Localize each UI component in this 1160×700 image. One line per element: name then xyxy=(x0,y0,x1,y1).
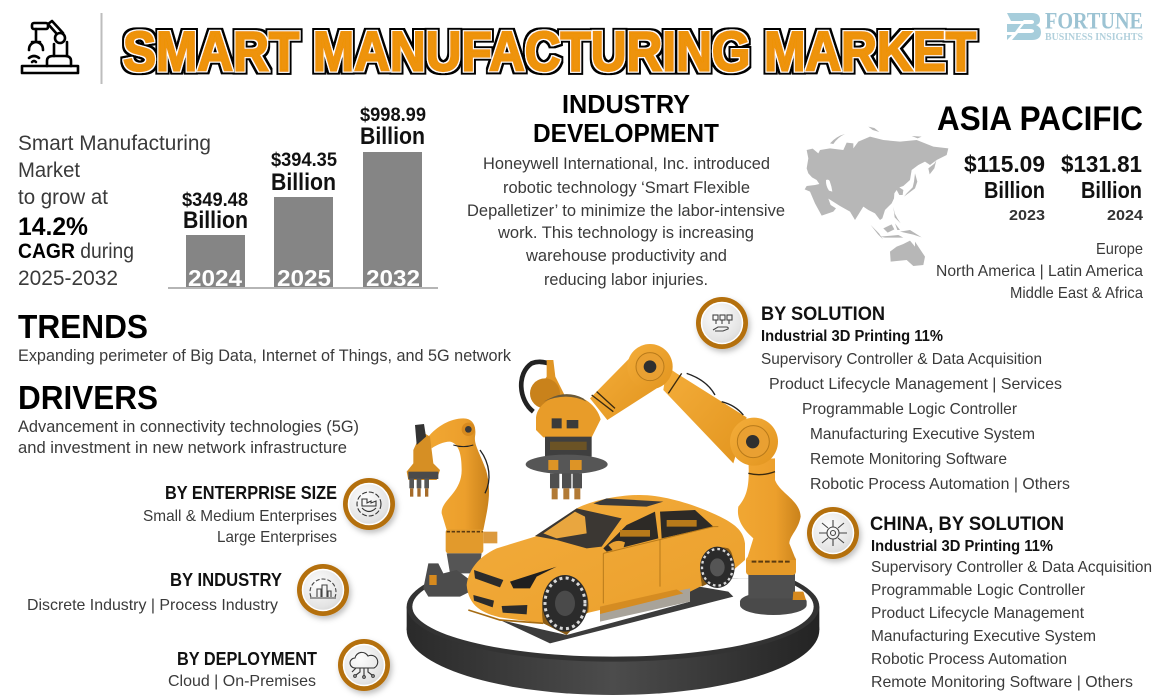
segment: China by solution: Programmable Logic Controller xyxy=(871,582,1086,599)
segment: by enterprise size: BY ENTERPRISE SIZE xyxy=(165,483,337,503)
value 2023: 2023 xyxy=(1009,207,1045,224)
other regions: North America | Latin America xyxy=(936,263,1143,280)
panel: trends xyxy=(18,308,512,365)
left robot xyxy=(407,418,497,597)
panel: industry development xyxy=(467,89,785,289)
segment: by solution: Product Lifecycle Management | Services xyxy=(769,376,1062,393)
panel: drivers xyxy=(18,379,359,457)
value 2023 xyxy=(964,151,1045,224)
bar 2024: Billion xyxy=(183,207,248,234)
bar chart: market size xyxy=(168,105,438,291)
text block: CAGR summary: 14.2% xyxy=(18,213,88,241)
paragraph: Honeywell International, Inc. introduced xyxy=(483,155,770,173)
text block: CAGR summary xyxy=(18,132,211,290)
segment: by enterprise size: Large Enterprises xyxy=(217,529,337,546)
other regions: Middle East & Africa xyxy=(1010,285,1143,302)
bar 2024 xyxy=(182,190,248,291)
segment: by enterprise size: Small & Medium Enterprises xyxy=(143,508,337,525)
icon: deployment xyxy=(338,639,390,691)
logo: Fortune Business Insights: BUSINESS INSIGHTS xyxy=(1045,32,1143,43)
segment: China by solution: Product Lifecycle Management xyxy=(871,605,1085,622)
title: SMART MANUFACTURING MARKET xyxy=(123,20,976,82)
segment: by deployment: Cloud | On-Premises xyxy=(168,673,316,690)
segment: by solution xyxy=(761,304,1070,493)
segment: China by solution: Industrial 3D Printing 11% xyxy=(871,538,1053,555)
segment: China by solution: Manufacturing Executive System xyxy=(871,628,1096,645)
segment: by industry: BY INDUSTRY xyxy=(170,570,282,590)
panel: trends: TRENDS xyxy=(18,308,148,345)
value 2023: $115.09 xyxy=(964,151,1045,177)
segment: China by solution: Supervisory Controller & Data Acquisition xyxy=(871,559,1152,576)
heading xyxy=(533,89,719,148)
segment: by industry xyxy=(27,570,282,614)
segment: by solution: Supervisory Controller & Data Acquisition xyxy=(761,351,1042,368)
panel: drivers: DRIVERS xyxy=(18,379,158,416)
segment: by solution: Programmable Logic Controller xyxy=(802,401,1018,418)
text block: CAGR summary: to grow at xyxy=(18,186,108,209)
paragraph: Depalletizer’ to minimize the labor-intensive xyxy=(467,202,785,220)
paragraph xyxy=(467,155,785,289)
segment: by solution: Remote Monitoring Software xyxy=(810,451,1007,468)
segment: by deployment xyxy=(168,649,317,690)
heading: ASIA PACIFIC xyxy=(937,100,1143,138)
text block: CAGR summary: 2025-2032 xyxy=(18,267,118,290)
paragraph: reducing labor injuries. xyxy=(544,271,708,289)
bar 2032: 2032 xyxy=(366,265,420,291)
logo: Fortune Business Insights: FORTUNE xyxy=(1045,8,1143,34)
bar 2025: $394.35 xyxy=(271,150,337,171)
logo: Fortune Business Insights xyxy=(1007,8,1143,43)
paragraph: robotic technology ‘Smart Flexible xyxy=(503,179,750,197)
text block: CAGR summary: Market xyxy=(18,159,80,182)
icon: industry xyxy=(297,564,349,616)
segment: China by solution: Remote Monitoring Software | Others xyxy=(871,674,1133,691)
text block: CAGR summary: Smart Manufacturing xyxy=(18,132,211,155)
bar 2032 xyxy=(360,105,426,291)
segment: by solution: BY SOLUTION xyxy=(761,304,885,325)
large robot arm xyxy=(521,344,807,615)
segment: by solution: Manufacturing Executive System xyxy=(810,426,1035,443)
paragraph: work. This technology is increasing xyxy=(497,224,754,242)
icon: enterprise size xyxy=(343,478,395,530)
panel: drivers: Advancement in connectivity technologies (5G) xyxy=(18,418,359,436)
heading: INDUSTRY xyxy=(562,89,690,119)
map: Asia Pacific xyxy=(805,127,948,266)
icon: by solution xyxy=(696,297,748,349)
segment: China by solution xyxy=(870,514,1152,691)
paragraph: warehouse productivity and xyxy=(525,247,727,265)
illustration: robots and car on platform xyxy=(407,344,819,695)
heading: DEVELOPMENT xyxy=(533,118,719,148)
value 2024: Billion xyxy=(1081,177,1142,203)
segment: China by solution: CHINA, BY SOLUTION xyxy=(870,514,1064,535)
text block: CAGR summary: CAGR during xyxy=(18,240,134,263)
segment: by solution: Industrial 3D Printing 11% xyxy=(761,328,943,345)
header divider xyxy=(100,13,102,84)
segment: by solution: Robotic Process Automation | Others xyxy=(810,476,1070,493)
bar 2024: 2024 xyxy=(188,265,242,291)
icon: china by solution xyxy=(807,507,859,559)
bar 2025 xyxy=(271,150,337,291)
segment: China by solution: Robotic Process Automation xyxy=(871,651,1067,668)
other regions: Europe xyxy=(1096,241,1143,258)
other regions xyxy=(936,241,1143,302)
icon: robot arm with wifi xyxy=(22,21,78,73)
platform ring xyxy=(406,578,820,695)
car xyxy=(467,495,745,643)
value 2024: 2024 xyxy=(1107,207,1144,224)
segment: by enterprise size xyxy=(143,483,337,546)
bar 2025: Billion xyxy=(271,169,336,196)
panel: drivers: and investment in new network infrastructure xyxy=(18,439,347,457)
bar 2025: 2025 xyxy=(277,265,331,291)
panel: Asia Pacific xyxy=(936,100,1144,302)
value 2024 xyxy=(1061,151,1144,224)
bar 2024: $349.48 xyxy=(182,190,248,211)
segment: by industry: Discrete Industry | Process Industry xyxy=(27,597,278,614)
panel: trends: Expanding perimeter of Big Data, Internet of Things, and 5G network xyxy=(18,347,512,365)
bar 2032: $998.99 xyxy=(360,105,426,126)
value 2024: $131.81 xyxy=(1061,151,1142,177)
bar 2032: Billion xyxy=(360,123,425,150)
value 2023: Billion xyxy=(984,177,1045,203)
segment: by deployment: BY DEPLOYMENT xyxy=(177,649,317,669)
